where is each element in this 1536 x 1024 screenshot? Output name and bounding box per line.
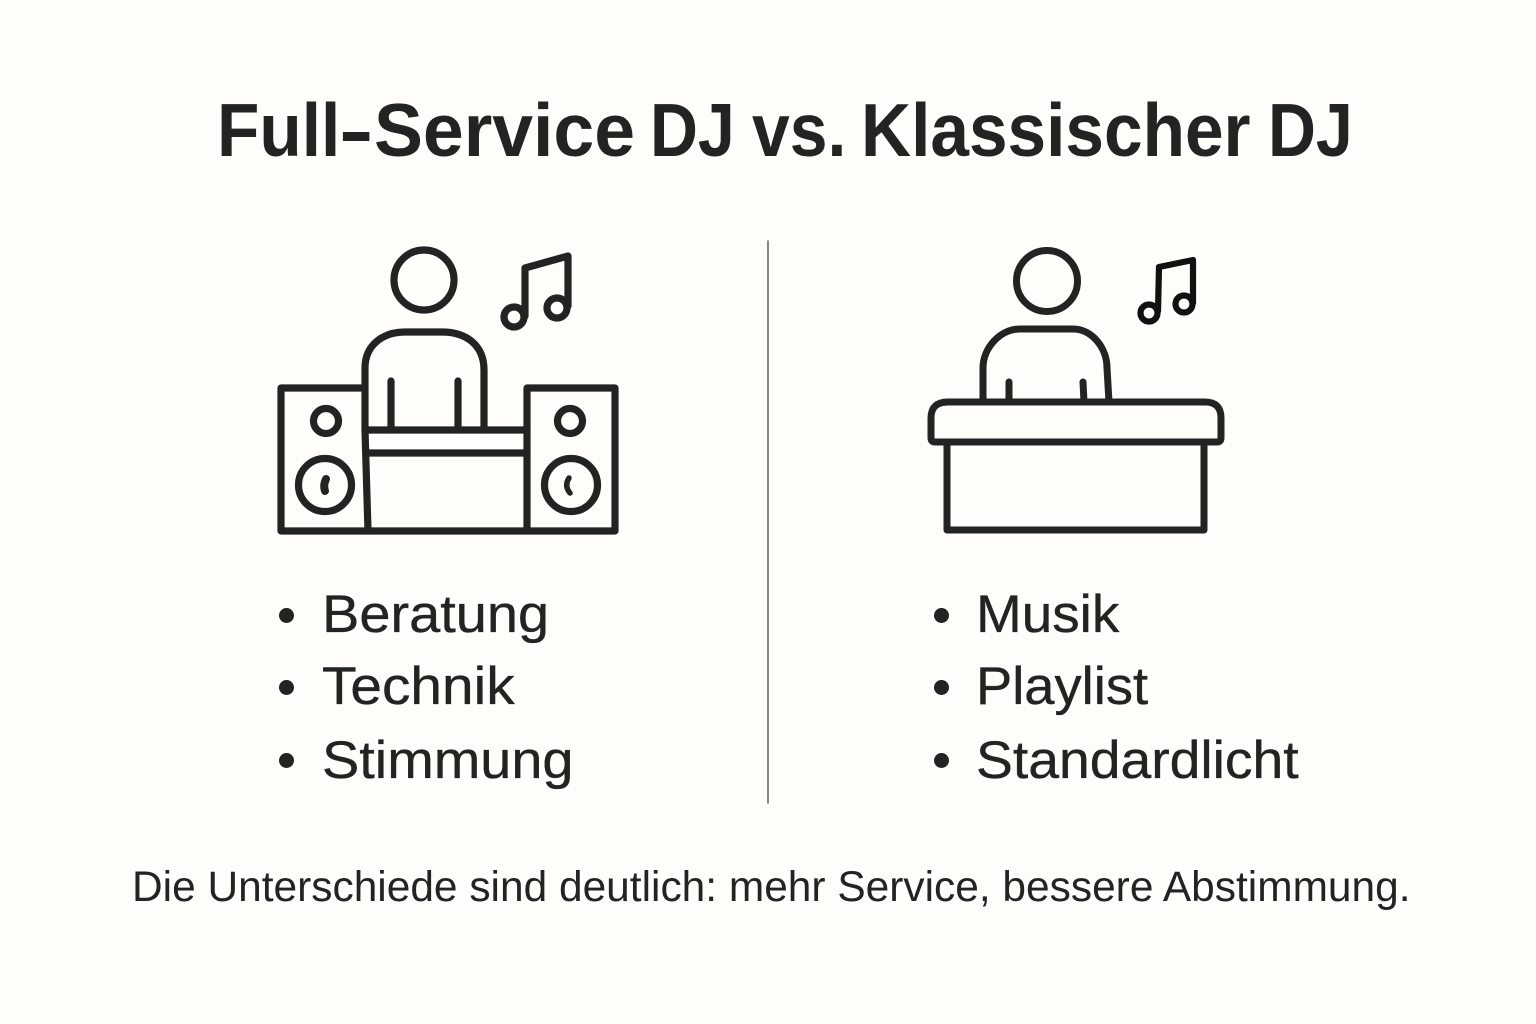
title: Klassischer	[861, 88, 1251, 172]
title: vs.	[752, 88, 846, 172]
title: Service	[374, 88, 635, 172]
icon: classic DJ at desk	[931, 250, 1221, 530]
footer summary text: Die Unterschiede sind deutlich: mehr Service, bessere Abstimmung.	[132, 863, 1411, 911]
title: Full	[217, 88, 340, 172]
left list	[279, 585, 573, 790]
bullet: Playlist: Playlist	[976, 657, 1148, 716]
bullet: Musik: Musik	[976, 585, 1119, 644]
icon: large music note	[504, 256, 568, 327]
bullet: Stimmung: Stimmung	[322, 731, 573, 790]
divider	[767, 241, 769, 803]
icon: full-service DJ with speakers	[281, 250, 615, 531]
bullet: Standardlicht: Standardlicht	[976, 731, 1299, 790]
title: DJ	[1268, 88, 1353, 172]
bullet: Technik: Technik	[322, 657, 515, 716]
icon: small music note	[1140, 260, 1193, 322]
title: DJ	[650, 88, 735, 172]
title: -	[339, 88, 374, 172]
title	[217, 88, 1353, 172]
right list	[934, 585, 1299, 790]
bullet: Beratung: Beratung	[322, 585, 549, 644]
